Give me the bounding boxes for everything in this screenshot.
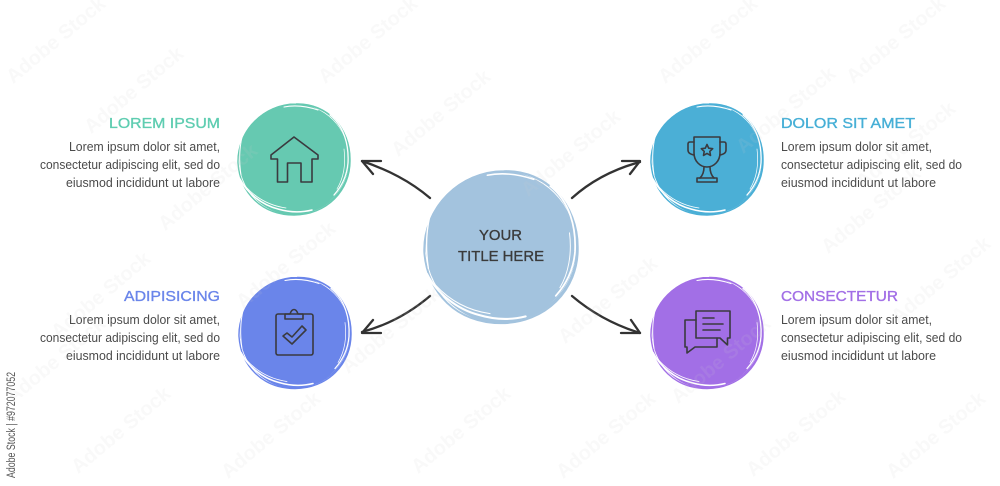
watermark: Adobe Stock [554, 252, 663, 348]
text block: lorem ipsum: consectetur adipiscing elit, sed do [40, 158, 220, 172]
text block: consectetur: eiusmod incididunt ut labore [781, 349, 936, 363]
center title: YOUR [479, 228, 522, 244]
icon: chat bubbles [685, 311, 730, 353]
watermark: Adobe Stock [852, 97, 961, 193]
watermark: Adobe Stock [232, 217, 341, 313]
text block: adipisicing: consectetur adipiscing elit, sed do [40, 331, 220, 345]
watermark: Adobe Stock [47, 247, 156, 343]
watermark: Adobe Stock [517, 105, 626, 201]
center title [458, 228, 544, 265]
arrow: top right [572, 161, 640, 198]
text block: consectetur: CONSECTETUR [781, 288, 898, 305]
watermark: Adobe Stock [337, 282, 446, 378]
text block: consectetur: consectetur adipiscing elit, sed do [781, 331, 962, 345]
circle: blue [651, 104, 763, 215]
text block: adipisicing: eiusmod incididunt ut labore [66, 349, 220, 363]
circle: indigo [239, 277, 351, 388]
text block: dolor sit amet: consectetur adipiscing elit, sed do [781, 158, 962, 172]
text block: lorem ipsum [40, 115, 220, 190]
icon: trophy [688, 137, 726, 182]
arrow: top left [362, 161, 430, 198]
arrow: bottom right [572, 296, 640, 333]
watermark: Adobe Stock [882, 387, 991, 483]
arrow: bottom left [362, 296, 430, 333]
center title: TITLE HERE [458, 249, 544, 265]
watermark: Adobe Stock [67, 382, 176, 478]
text block: lorem ipsum: eiusmod incididunt ut labore [66, 176, 220, 190]
watermark: Adobe Stock [217, 387, 326, 483]
text block: dolor sit amet: Lorem ipsum dolor sit amet, [781, 140, 932, 154]
text block: dolor sit amet: eiusmod incididunt ut labore [781, 176, 936, 190]
text block: adipisicing [40, 288, 220, 363]
watermark: Adobe Stock [154, 139, 263, 235]
watermark: Adobe Stock [887, 232, 996, 328]
text block: consectetur: Lorem ipsum dolor sit amet, [781, 313, 932, 327]
watermark: Adobe Stock [552, 387, 661, 483]
watermark: Adobe Stock [387, 65, 496, 161]
watermark: Adobe Stock [80, 42, 189, 138]
text block: adipisicing: Lorem ipsum dolor sit amet, [69, 313, 220, 327]
watermark: Adobe Stock [732, 62, 841, 158]
icon: house [271, 137, 318, 182]
watermark: Adobe Stock [667, 312, 776, 408]
watermark: Adobe Stock [2, 312, 111, 408]
watermark: Adobe Stock [742, 385, 851, 481]
circle: center [424, 171, 578, 323]
text block: dolor sit amet [781, 115, 962, 190]
text block: dolor sit amet: DOLOR SIT AMET [781, 115, 915, 132]
circle: purple [651, 277, 763, 388]
text block: consectetur [781, 288, 962, 363]
watermark: Adobe Stock [817, 162, 926, 258]
circle: green [238, 104, 350, 215]
text block: lorem ipsum: LOREM IPSUM [109, 115, 220, 132]
watermark: Adobe Stock [407, 382, 516, 478]
icon: clipboard [276, 310, 313, 355]
text block: lorem ipsum: Lorem ipsum dolor sit amet, [69, 140, 220, 154]
stock id label: Adobe Stock | #972077052 [6, 372, 18, 478]
text block: adipisicing: ADIPISICING [124, 288, 220, 305]
